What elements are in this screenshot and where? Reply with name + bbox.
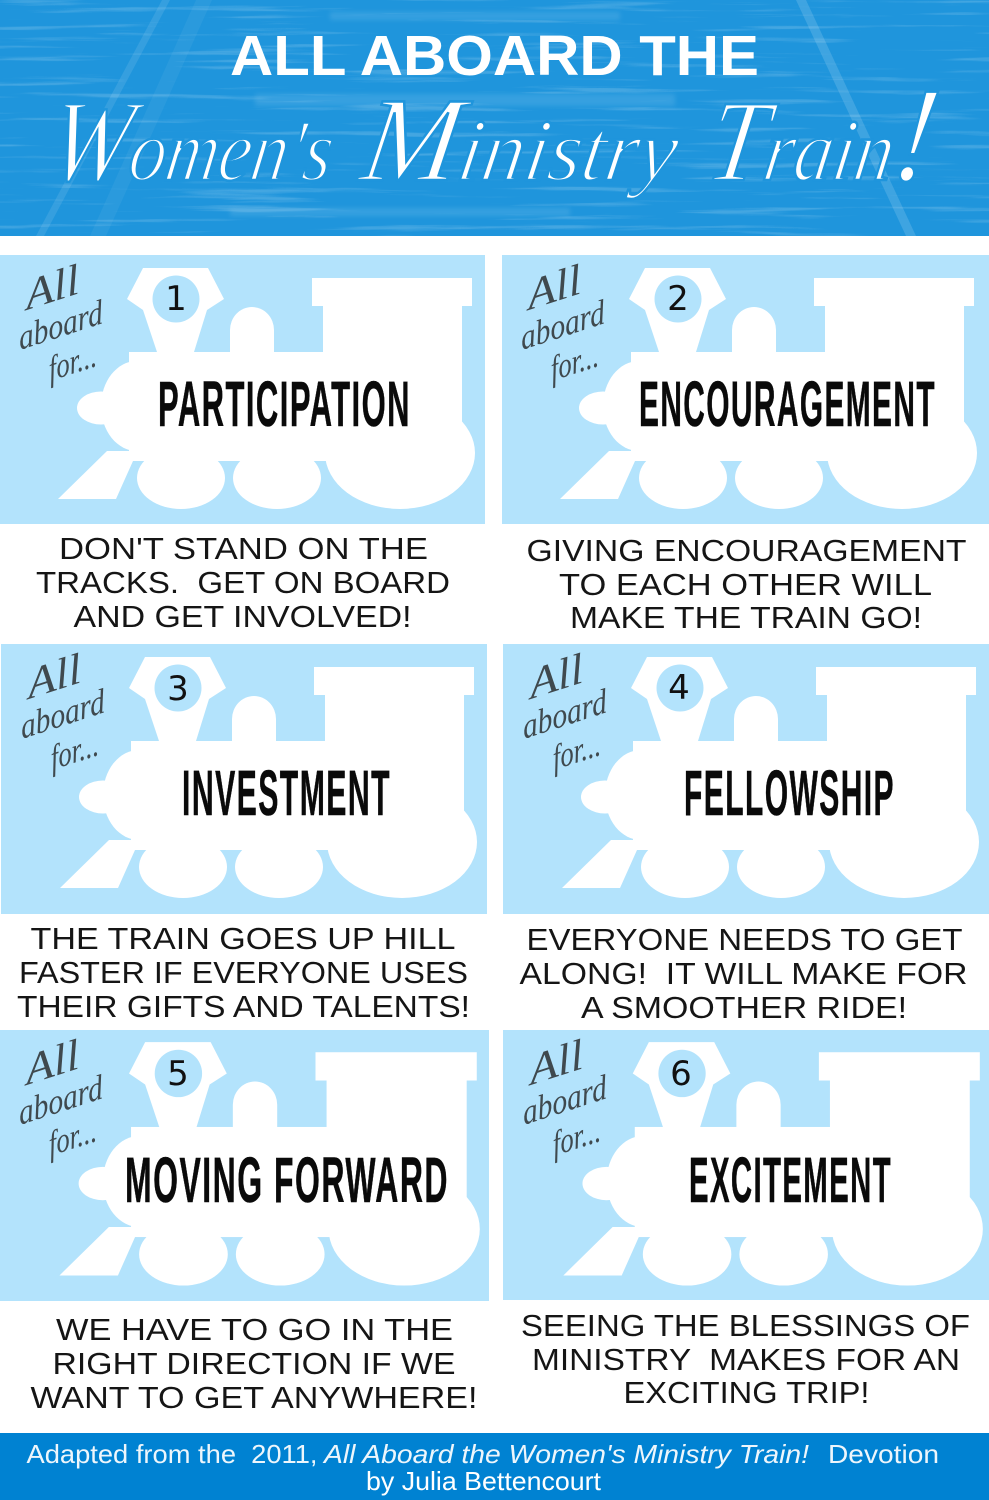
- footer line one: Adapted from the 2011,: [26, 1439, 318, 1469]
- title line one: ALL ABOARD THE: [230, 24, 759, 88]
- script label: aboard: [521, 1067, 609, 1133]
- caption 1: TRACKS. GET ON BOARD: [36, 565, 450, 600]
- caption 4: A SMOOTHER RIDE!: [581, 990, 907, 1025]
- script label: All: [522, 255, 583, 321]
- caption 5: RIGHT DIRECTION IF WE: [52, 1346, 456, 1381]
- panel 2: encouragement: [502, 255, 989, 524]
- panel 3: investment: INVESTMENT: [182, 757, 391, 829]
- caption 2: MAKE THE TRAIN GO!: [570, 600, 922, 635]
- title script line: Women's: [42, 77, 345, 206]
- script label: aboard: [17, 1067, 105, 1133]
- caption 3: [17, 921, 470, 1024]
- script label: for...: [549, 335, 600, 389]
- caption 5: [30, 1312, 478, 1415]
- caption 4: EVERYONE NEEDS TO GET: [526, 922, 963, 957]
- caption 5: WANT TO GET ANYWHERE!: [30, 1380, 478, 1415]
- script label: for...: [551, 724, 602, 778]
- script label: [519, 255, 607, 389]
- caption 4: [520, 922, 968, 1025]
- panel 1: participation: PARTICIPATION: [158, 368, 411, 440]
- panel 6: excitement: [503, 1030, 989, 1300]
- script label: aboard: [519, 292, 607, 358]
- number 4: 4: [668, 668, 690, 708]
- number 5: 5: [167, 1054, 189, 1094]
- caption 3: THE TRAIN GOES UP HILL: [30, 921, 456, 956]
- script label: [19, 644, 107, 778]
- panel 5: moving forward: MOVING FORWARD: [125, 1144, 449, 1216]
- caption 6: SEEING THE BLESSINGS OF: [521, 1308, 970, 1343]
- script label: for...: [47, 1110, 98, 1164]
- caption 1: [36, 531, 450, 634]
- script label: aboard: [19, 681, 107, 747]
- script label: All: [524, 1030, 585, 1096]
- title script line: Train!: [699, 60, 948, 210]
- caption 3: THEIR GIFTS AND TALENTS!: [17, 989, 470, 1024]
- caption 5: WE HAVE TO GO IN THE: [56, 1312, 453, 1347]
- script label: for...: [47, 335, 98, 389]
- script label: [521, 644, 609, 778]
- number 1: 1: [165, 279, 187, 319]
- caption 6: MINISTRY MAKES FOR AN: [532, 1342, 960, 1377]
- caption 3: FASTER IF EVERYONE USES: [19, 955, 468, 990]
- caption 6: [521, 1308, 970, 1410]
- number 2: 2: [667, 279, 689, 319]
- panel 4: fellowship: [503, 644, 989, 914]
- number 6: 6: [670, 1054, 692, 1094]
- caption 2: TO EACH OTHER WILL: [559, 567, 932, 602]
- footer: [0, 1433, 989, 1500]
- script label: All: [524, 644, 585, 710]
- caption 4: ALONG! IT WILL MAKE FOR: [520, 956, 968, 991]
- panel 1: participation: [0, 255, 485, 524]
- footer line one: [26, 1439, 939, 1469]
- footer line one: All Aboard the Women's Ministry Train!: [322, 1439, 809, 1469]
- caption 2: [526, 533, 967, 635]
- footer line two: by Julia Bettencourt: [366, 1466, 602, 1496]
- panel 3: investment: [1, 644, 487, 914]
- header banner: [0, 0, 989, 236]
- caption 1: DON'T STAND ON THE: [59, 531, 428, 566]
- script label: for...: [551, 1110, 602, 1164]
- footer line one: Devotion: [828, 1439, 939, 1469]
- script label: All: [20, 255, 81, 321]
- panel 5: moving forward: [0, 1030, 489, 1301]
- script label: [17, 255, 105, 389]
- script label: [521, 1030, 609, 1164]
- title script line: [42, 60, 948, 210]
- title script line: Ministry: [352, 73, 690, 206]
- script label: aboard: [17, 292, 105, 358]
- caption 2: GIVING ENCOURAGEMENT: [526, 533, 967, 568]
- script label: aboard: [521, 681, 609, 747]
- script label: All: [22, 644, 83, 710]
- caption 1: AND GET INVOLVED!: [74, 599, 412, 634]
- script label: for...: [49, 724, 100, 778]
- number 3: 3: [167, 669, 189, 709]
- script label: All: [20, 1030, 81, 1096]
- script label: [17, 1030, 105, 1164]
- caption 6: EXCITING TRIP!: [624, 1375, 870, 1410]
